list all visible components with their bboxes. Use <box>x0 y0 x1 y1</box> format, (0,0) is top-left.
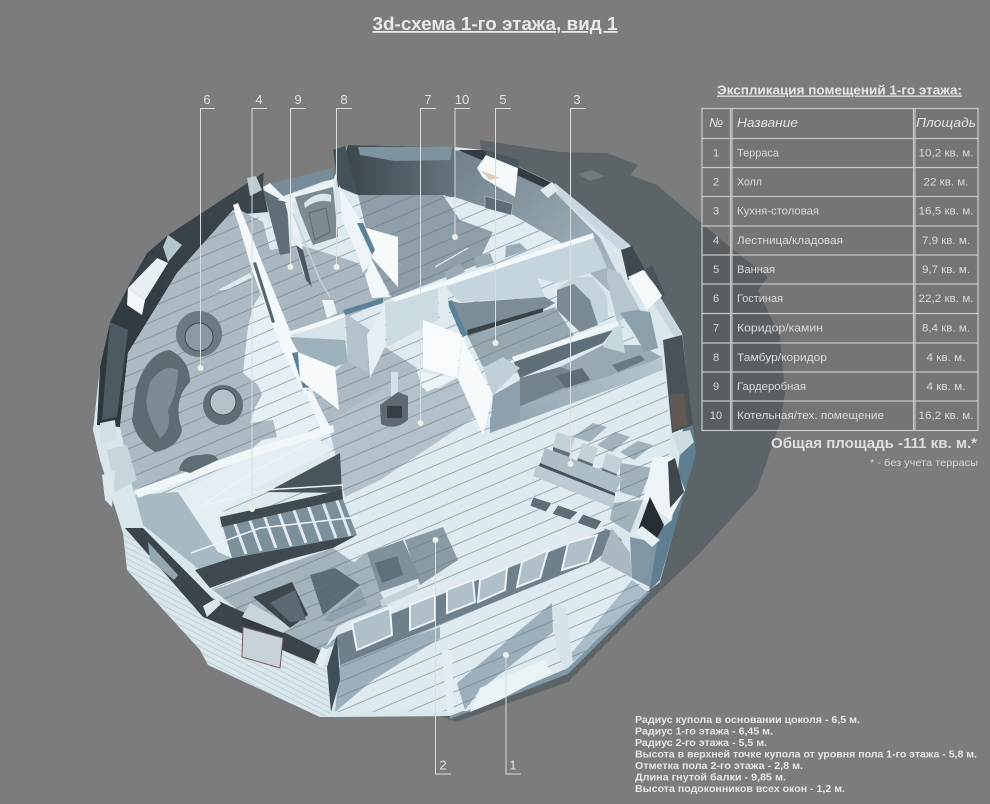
vestibule right wall <box>339 185 372 273</box>
window: lower left dormer <box>242 603 293 668</box>
dark band behind rim <box>458 150 556 193</box>
rear wall, boiler room <box>340 145 455 197</box>
table edge <box>539 463 615 496</box>
partition wedge, upper <box>290 318 345 340</box>
wall top <box>392 233 594 302</box>
row 3: 3 <box>713 206 719 218</box>
row 3: Кухня-столовая <box>737 206 819 218</box>
label 6 <box>198 92 215 371</box>
floor: hall light patch <box>417 372 455 392</box>
table header <box>709 115 976 130</box>
lower left exterior siding <box>123 528 330 717</box>
row 8 <box>713 352 966 364</box>
dormer glass <box>242 627 283 668</box>
row 2: 2 <box>713 176 719 188</box>
label 9: 9 <box>294 92 302 107</box>
label 7 <box>418 92 436 426</box>
lower flight <box>220 497 357 558</box>
bathtub <box>557 277 608 332</box>
stair landing <box>135 492 232 570</box>
table header: Название <box>737 115 798 130</box>
row 2 <box>713 176 968 188</box>
entry block <box>263 146 390 318</box>
front door <box>295 187 338 245</box>
row 9: 4 кв. м. <box>926 381 966 393</box>
left rim upper <box>100 420 117 445</box>
dark rear wall ring, left <box>97 172 268 427</box>
floor: mid shadow patch <box>323 588 367 622</box>
label 1: 1 <box>509 758 517 772</box>
label 2 <box>432 537 451 774</box>
main wall center <box>385 288 438 347</box>
small light patch in the shadow <box>578 170 605 181</box>
glazing top frame <box>325 526 605 648</box>
left wall panel <box>102 322 128 420</box>
door to bathroom, blue frame <box>423 285 493 435</box>
label 5: 5 <box>499 92 507 107</box>
row 6: 22,2 кв. м. <box>918 293 974 305</box>
lower left sofa <box>253 582 308 628</box>
floor: boiler room shade <box>358 195 493 298</box>
row 1: 1 <box>713 148 719 160</box>
row 5: 5 <box>713 264 719 276</box>
wall face <box>445 237 607 302</box>
counter front <box>490 358 663 433</box>
brown wall strip <box>670 393 688 430</box>
stair wall and stairs <box>135 425 358 588</box>
row 7: Коридор/камин <box>737 322 823 334</box>
long partition: living room <box>233 203 333 435</box>
center partitions and doors <box>288 223 438 410</box>
label 4: 4 <box>255 92 263 107</box>
door white, upper <box>363 227 398 287</box>
floor: main room <box>120 195 670 650</box>
wall between wardrobe and vestibule <box>285 202 312 287</box>
partition top <box>288 313 346 336</box>
void under upper flight <box>267 453 342 493</box>
rim, right curve <box>552 183 682 340</box>
table heading: Экспликация помещений 1-го этажа: <box>717 82 962 98</box>
partition end <box>305 390 333 435</box>
outer wall, terrace right <box>630 537 657 587</box>
closet side <box>263 190 290 255</box>
floor: bathroom <box>468 307 577 367</box>
floor: entry corridors <box>240 210 392 334</box>
light streak, boiler room <box>435 248 468 267</box>
window: left dormer <box>127 255 168 315</box>
dining shadows <box>573 423 653 533</box>
label 1 <box>503 652 521 774</box>
row 4: 7,9 кв. м. <box>922 235 970 247</box>
title: 3d-схема 1-го этажа, вид 1 <box>372 14 618 34</box>
row 9: Гардеробная <box>737 381 806 393</box>
upper flight <box>180 427 333 517</box>
floor: lower left hall <box>213 548 395 652</box>
cast shadow of the dome <box>400 140 785 722</box>
label 7: 7 <box>424 92 432 107</box>
lower left window <box>102 445 137 507</box>
row 3: 16,5 кв. м. <box>918 206 974 218</box>
vestibule wall lower <box>365 260 390 298</box>
row 6: Гостиная <box>737 293 783 305</box>
dining table <box>530 432 623 530</box>
rail of vestibule wall <box>293 213 330 297</box>
pier marker, bottom <box>315 647 328 668</box>
pier marker, top left <box>163 235 182 262</box>
row 10 <box>710 410 974 422</box>
row 3 <box>713 206 974 218</box>
glazing wall <box>325 526 622 665</box>
row 8: 8 <box>713 352 719 364</box>
dome outer shell <box>93 145 695 717</box>
dome cutaway floor plan <box>93 92 696 774</box>
row 7: 8,4 кв. м. <box>922 322 970 334</box>
corridor opening <box>345 313 370 372</box>
partition blue glass <box>292 352 310 388</box>
floor: terrace <box>335 562 647 712</box>
row 10: 10 <box>710 410 722 422</box>
armchair by glazing <box>367 540 420 607</box>
long main wall <box>392 233 640 337</box>
rear wall, right curve <box>455 150 640 320</box>
footnote: * - без учета террасы <box>870 457 978 469</box>
dimensions notes: Радиус 2-го этажа - 5,5 м. <box>635 738 767 749</box>
curved wall, terrace right <box>600 528 632 578</box>
pillar top <box>483 357 520 395</box>
dimensions notes: Высота в верхней точке купола от уровня пола 1-го этажа - 5,8 м. <box>635 750 977 760</box>
hob <box>612 355 645 372</box>
chair seats, far side <box>553 447 617 478</box>
armchair <box>176 311 222 357</box>
kitchen worktop <box>518 345 662 407</box>
window: right dormer <box>635 430 694 547</box>
room schedule table <box>702 108 978 431</box>
floor: living room light patch <box>243 295 333 453</box>
floor: living room shade <box>120 210 335 490</box>
floor board lines <box>120 195 670 650</box>
dimensions notes: Радиус купола в основании цоколя - 6,5 м. <box>635 715 860 726</box>
kitchen dark triangle <box>518 367 590 407</box>
wall lower segment <box>322 300 337 318</box>
pier: entry right <box>333 146 358 195</box>
total area: Общая площадь -111 кв. м.* <box>771 435 977 452</box>
label 3: 3 <box>573 92 581 107</box>
dormer roof <box>242 603 293 633</box>
row 7 <box>713 322 970 334</box>
dimensions notes: Радиус 1-го этажа - 6,45 м. <box>635 726 773 738</box>
floor: terrace right edge shade <box>570 580 647 665</box>
row 5 <box>713 264 970 276</box>
dormer dark band <box>242 617 283 638</box>
table front <box>533 465 615 508</box>
floor: hall lower shade <box>328 368 475 497</box>
row 5: 9,7 кв. м. <box>922 264 970 276</box>
partition dark slit <box>253 262 275 323</box>
label 8: 8 <box>340 92 348 107</box>
stair landing light <box>178 492 243 558</box>
row 10: 16,2 кв. м. <box>918 410 974 422</box>
chimney block <box>620 310 658 352</box>
floor: boiler room light <box>443 195 560 265</box>
window: top dormer <box>477 150 520 197</box>
round ottoman <box>203 385 243 425</box>
second armchair <box>179 454 218 473</box>
dining chairs, near side <box>530 497 602 530</box>
pier marker, top <box>247 176 262 196</box>
row 6: 6 <box>713 293 719 305</box>
pillar front <box>490 380 520 430</box>
lower left dark wall <box>125 528 320 665</box>
pier markers, upper right <box>540 182 634 260</box>
partition wedge, lower <box>290 337 348 367</box>
lower flight treads <box>232 498 350 554</box>
row 4 <box>713 235 970 247</box>
chairs in boiler room <box>444 243 527 280</box>
label 10: 10 <box>455 92 469 107</box>
row 2: 22 кв. м. <box>924 176 968 188</box>
glass panes <box>352 535 597 650</box>
terrace board lines <box>335 562 647 712</box>
terrace columns <box>442 607 573 713</box>
top exterior band <box>358 147 452 161</box>
stair wall top <box>135 425 334 498</box>
closet top <box>263 183 287 202</box>
label 2: 2 <box>439 758 447 772</box>
bathroom back wall <box>447 297 555 337</box>
label 3 <box>568 92 586 467</box>
row 6 <box>713 293 974 305</box>
glazing wall body <box>337 528 622 665</box>
table tint <box>702 108 978 430</box>
floor: shade beneath armchair right <box>405 527 458 585</box>
floor: dark shadow patch <box>310 568 360 615</box>
right dark wall <box>663 335 693 433</box>
row 4: Лестница/кладовая <box>737 235 843 247</box>
dimensions notes <box>635 715 977 795</box>
table top <box>540 448 622 493</box>
sink <box>556 368 590 388</box>
entry wall top <box>277 179 334 203</box>
floors <box>120 195 670 712</box>
row 10: Котельная/тех. помещение <box>737 410 884 422</box>
dark slit of wardrobe wall <box>296 245 312 287</box>
dark strip under stairs <box>195 535 357 588</box>
sofa <box>132 350 190 452</box>
hood <box>603 317 625 353</box>
radiator <box>485 196 513 215</box>
label 5 <box>492 92 511 346</box>
dark riser row <box>220 490 343 527</box>
terrace corner dark wall <box>327 635 340 712</box>
dimensions notes: Высота подоконников всех окон - 1,2 м. <box>635 784 845 795</box>
labels and leader lines <box>198 92 586 774</box>
table grid <box>702 108 978 431</box>
kitchen upper wall top <box>512 321 619 362</box>
floor: terrace diagonal shade <box>457 603 553 710</box>
pier marker, lower left <box>203 598 221 617</box>
label 4 <box>249 92 267 512</box>
dimensions notes: Длина гнутой балки - 9,85 м. <box>635 772 786 784</box>
dimensions notes: Отметка пола 2-го этажа - 2,8 м. <box>635 761 803 772</box>
dining chairs, far side <box>553 432 623 474</box>
terrace edge <box>450 590 650 719</box>
table header: № <box>709 115 723 130</box>
stove <box>380 372 408 427</box>
label 9 <box>288 92 306 270</box>
entry wall band behind <box>272 168 333 198</box>
kitchen back wall <box>513 330 613 378</box>
window: upper right dormer <box>621 246 665 310</box>
floor: terrace left shade <box>335 627 440 712</box>
door white, lower <box>298 353 339 410</box>
row 8: Тамбур/коридор <box>737 352 827 364</box>
row 4: 4 <box>713 235 719 247</box>
label 10 <box>452 92 470 240</box>
floor: lit strip by armchair <box>333 518 440 562</box>
floor: small light patch by partition <box>218 273 252 290</box>
row 2: Холл <box>737 176 762 188</box>
row 1: 10,2 кв. м. <box>918 148 974 160</box>
kitchen <box>483 310 663 433</box>
blue glass strip <box>343 298 383 315</box>
row 8: 4 кв. м. <box>926 352 966 364</box>
partition face <box>233 203 310 395</box>
row 7: 7 <box>713 322 719 334</box>
label 6: 6 <box>203 92 211 107</box>
bath wall beyond <box>607 268 640 322</box>
blue glass strip 2 <box>357 223 375 255</box>
row 9 <box>713 381 966 393</box>
outer shell right side <box>640 420 696 590</box>
row 1 <box>713 148 974 160</box>
row 5: Ванная <box>737 264 775 276</box>
label 8 <box>334 92 352 270</box>
stair railings <box>191 431 358 553</box>
floor: hall shade <box>310 347 417 423</box>
wall inner, lower left light panel <box>148 542 178 580</box>
row 9: 9 <box>713 381 719 393</box>
dark bar <box>467 308 543 335</box>
table header: Площадь <box>916 115 976 130</box>
row 1: Терраса <box>737 148 780 160</box>
door panel center <box>367 305 385 378</box>
